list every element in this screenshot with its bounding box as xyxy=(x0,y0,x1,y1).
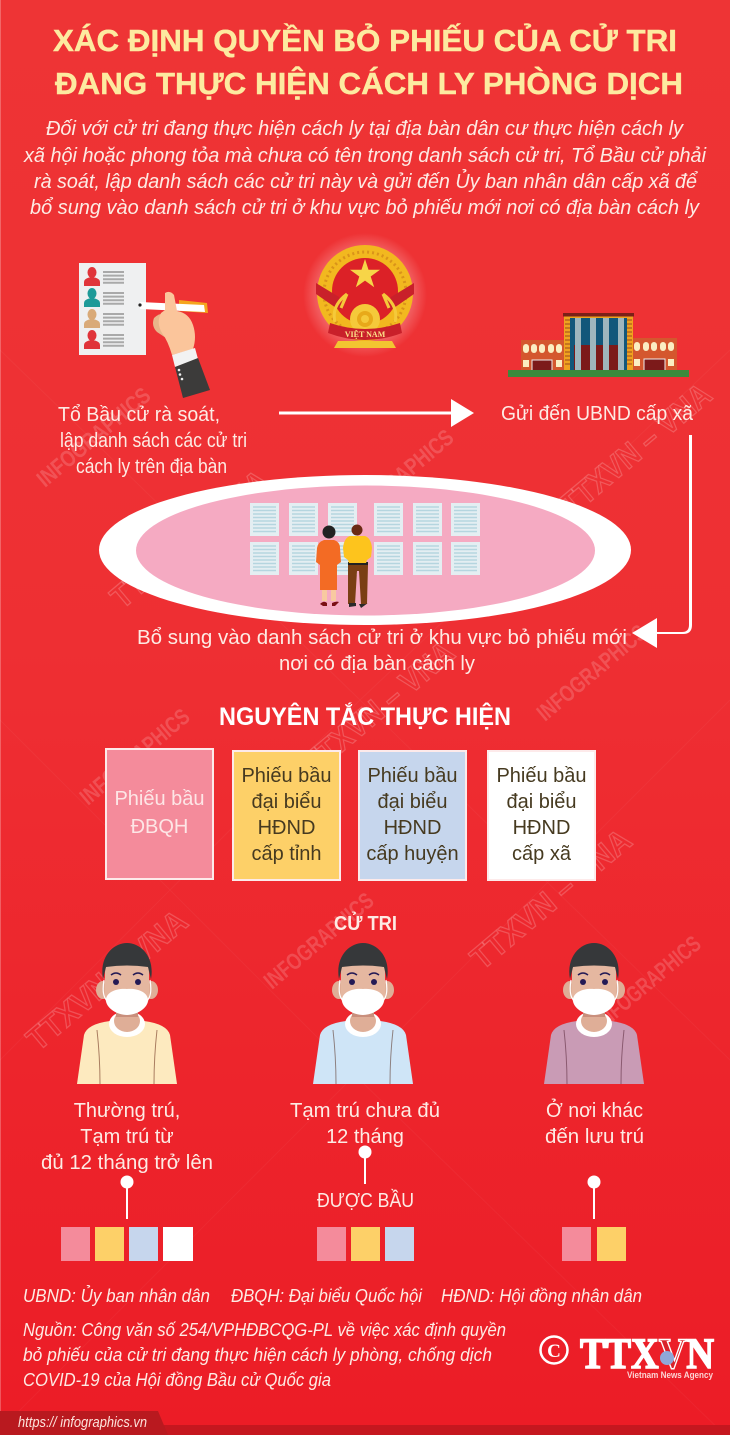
label: voter 3: đến lưu trú xyxy=(545,1126,644,1148)
ballot: province xyxy=(233,751,340,880)
intro text: rà soát, lập danh sách các cử tri này và gửi đến Ủy ban nhân dân cấp xã để xyxy=(34,169,698,193)
label: voter 1 xyxy=(41,1100,213,1174)
ballot: district xyxy=(359,751,466,880)
label: voter 2: Tạm trú chưa đủ xyxy=(290,1100,440,1122)
legend: abbreviations: HĐND: Hội đồng nhân dân xyxy=(441,1286,642,1306)
ballot: province: HĐND xyxy=(258,817,315,839)
ballot: commune: cấp xã xyxy=(512,843,572,865)
ballots: voter 3 xyxy=(562,1227,626,1261)
ballot: national assembly: ĐBQH xyxy=(131,816,188,838)
icon: voter 2 xyxy=(313,943,413,1084)
watermarks: INFOGRAPHICS xyxy=(532,619,652,726)
ballot: district: Phiếu bầu xyxy=(367,765,458,787)
label: voter 2 xyxy=(290,1100,440,1148)
icon: man xyxy=(343,524,372,608)
watermarks: TTXVN – VNA xyxy=(463,822,638,976)
step: election team xyxy=(58,404,247,478)
label: eligible: ĐƯỢC BẦU xyxy=(317,1189,414,1212)
ballots: voter 1 xyxy=(61,1227,193,1261)
title xyxy=(53,22,683,101)
label: voter 2: 12 tháng xyxy=(326,1126,404,1148)
ballot: commune: Phiếu bầu xyxy=(496,765,587,787)
ballot: province: đại biểu xyxy=(251,791,322,813)
icon: voter list with hand and pen xyxy=(79,263,210,398)
pin: voter 2 xyxy=(358,1146,372,1184)
icon: woman xyxy=(316,526,341,606)
icon: voter 3 xyxy=(544,943,644,1084)
arrow: to commune committee xyxy=(279,399,474,427)
intro text xyxy=(23,118,707,219)
icon: national emblem xyxy=(303,233,427,357)
step: supplement list xyxy=(137,627,627,675)
step: election team: Tổ Bầu cử rà soát, xyxy=(58,404,220,426)
watermarks xyxy=(19,376,718,1057)
intro text: Đối với cử tri đang thực hiện cách ly tại địa bàn dân cư thực hiện cách ly xyxy=(46,118,684,140)
watermarks: TTXVN – VNA xyxy=(296,634,461,780)
ballot: commune xyxy=(488,751,595,880)
watermarks: INFOGRAPHICS xyxy=(259,887,379,994)
ballot: province: cấp tỉnh xyxy=(251,843,322,865)
source note: bỏ phiếu của cử tri đang thực hiện cách ly phòng, chống dịch xyxy=(23,1345,492,1365)
heading: principles: NGUYÊN TẮC THỰC HIỆN xyxy=(219,701,511,731)
step: send to commune committee: Gửi đến UBND cấp xã xyxy=(501,403,694,425)
ballot: district: HĐND xyxy=(384,817,441,839)
ballot: national assembly xyxy=(106,749,213,879)
logo: TTXVN: Vietnam News Agency xyxy=(627,1370,713,1380)
icon: commune people's committee building xyxy=(508,313,689,377)
label: voter 1: Tạm trú từ xyxy=(80,1126,174,1148)
ballot: district: đại biểu xyxy=(377,791,448,813)
footer bar: https:// infographics.vn xyxy=(18,1414,147,1431)
footer bar xyxy=(0,1411,730,1435)
step: supplement list: Bổ sung vào danh sách cử tri ở khu vực bỏ phiếu mới xyxy=(137,627,627,649)
legend: abbreviations: UBND: Ủy ban nhân dân xyxy=(23,1285,210,1306)
watermarks: TTXVN – VNA xyxy=(19,903,194,1057)
legend: abbreviations: ĐBQH: Đại biểu Quốc hội xyxy=(231,1286,423,1306)
watermarks: INFOGRAPHICS xyxy=(75,703,195,810)
step: supplement list: nơi có địa bàn cách ly xyxy=(279,653,475,675)
ballot: province: Phiếu bầu xyxy=(241,765,332,787)
step: election team: cách ly trên địa bàn xyxy=(76,456,227,478)
step: election team: lập danh sách các cử tri xyxy=(60,430,247,452)
watermarks: INFOGRAPHICS xyxy=(335,424,458,534)
logo: TTXVN: C xyxy=(547,1341,561,1362)
ballots: voter 2 xyxy=(317,1227,414,1261)
intro text: bổ sung vào danh sách cử tri ở khu vực bỏ phiếu mới nơi có địa bàn cách ly xyxy=(30,197,700,219)
source note: Nguồn: Công văn số 254/VPHĐBCQG-PL về việc xác định quyền xyxy=(23,1320,506,1340)
legend: abbreviations xyxy=(23,1285,642,1306)
label: voter 1: đủ 12 tháng trở lên xyxy=(41,1152,213,1174)
title: ĐANG THỰC HIỆN CÁCH LY PHÒNG DỊCH xyxy=(55,65,683,101)
heading: voters: CỬ TRI xyxy=(334,911,397,935)
ballot: commune: đại biểu xyxy=(506,791,577,813)
source note xyxy=(23,1320,506,1390)
intro text: xã hội hoặc phong tỏa mà chưa có tên trong danh sách cử tri, Tổ Bầu cử phải xyxy=(23,145,707,167)
ballot: commune: HĐND xyxy=(513,817,570,839)
ballot: national assembly: Phiếu bầu xyxy=(114,788,205,810)
label: voter 1: Thường trú, xyxy=(74,1100,180,1122)
pin: voter 3 xyxy=(588,1176,600,1219)
watermarks: INFOGRAPHICS xyxy=(32,382,155,492)
ballot: district: cấp huyện xyxy=(366,843,459,865)
icon: voter 1 xyxy=(77,943,177,1084)
source note: COVID-19 của Hội đồng Bầu cử Quốc gia xyxy=(23,1370,331,1390)
icon: national emblem: VIỆT NAM xyxy=(345,330,386,339)
watermarks: TTXVN – VNA xyxy=(103,462,276,615)
logo: TTXVN: TTXVN xyxy=(580,1331,714,1378)
arrow: to supplementary list xyxy=(632,435,692,648)
pin: voter 1 xyxy=(120,1176,134,1219)
label: voter 3 xyxy=(545,1098,644,1148)
panel: voter list board xyxy=(99,475,631,625)
title: XÁC ĐỊNH QUYỀN BỎ PHIẾU CỦA CỬ TRI xyxy=(53,22,677,58)
label: voter 3: Ở nơi khác xyxy=(546,1098,643,1122)
